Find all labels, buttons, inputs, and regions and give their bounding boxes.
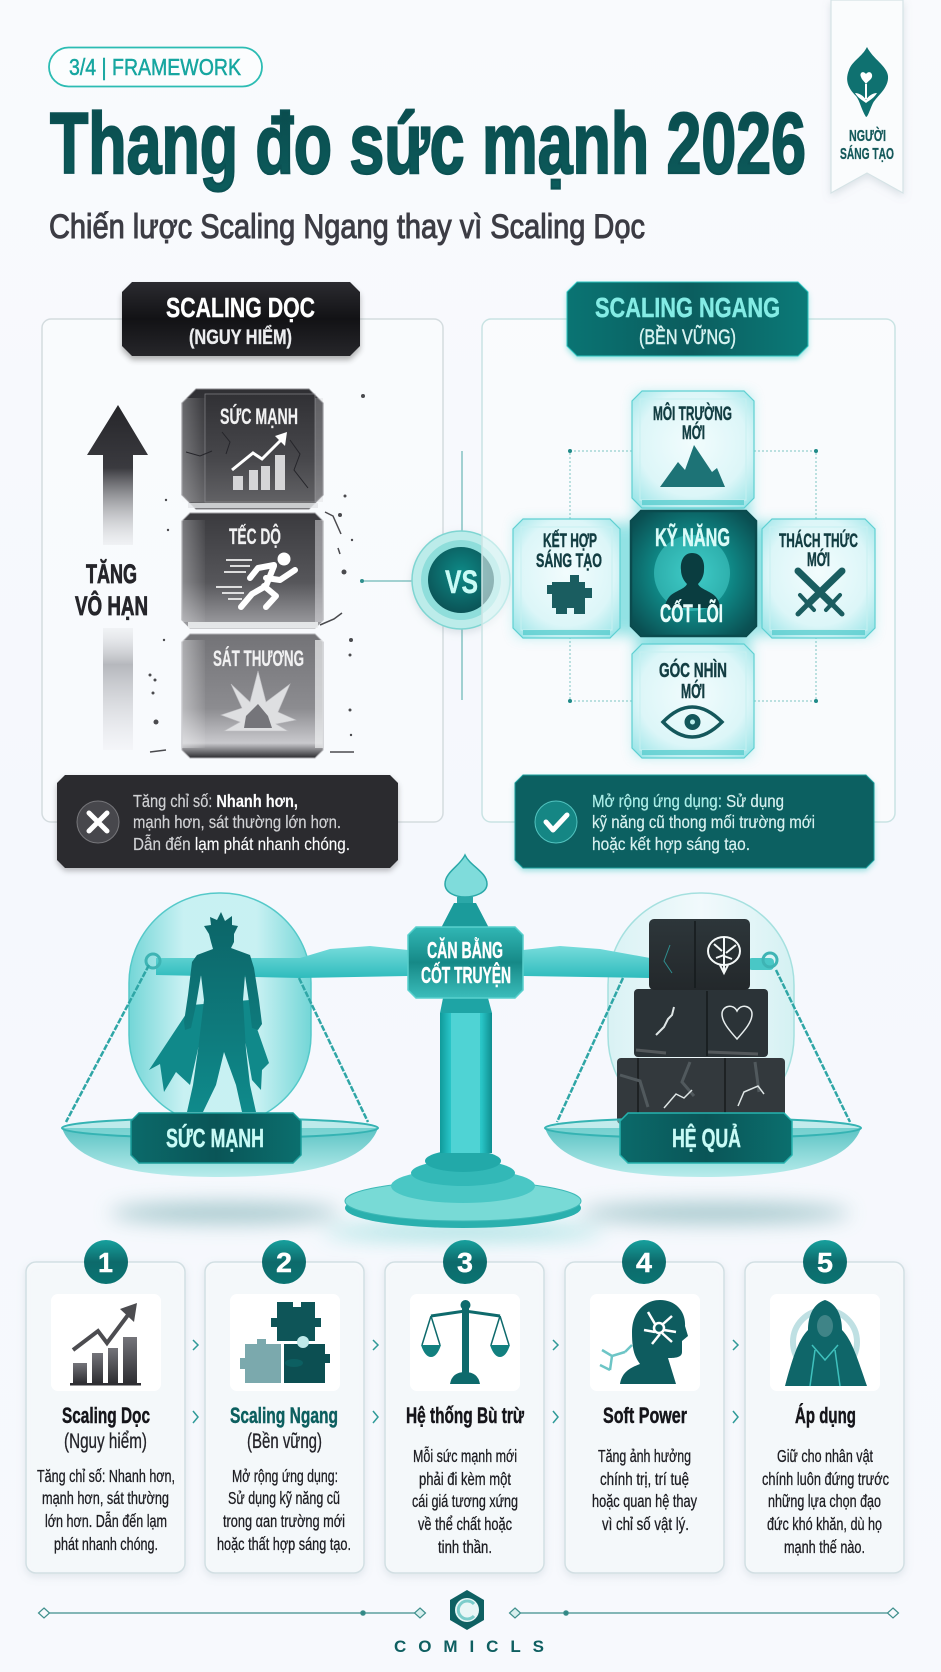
- icon: puzzle: [230, 1294, 340, 1391]
- step card 1: Tăng chỉ số: Nhanh hơn,: [37, 1466, 175, 1486]
- step card 4: chính trị, trí tuệ: [600, 1469, 689, 1489]
- badge 4: [622, 1240, 666, 1284]
- label: cân bằng cốt truyện: CỐT TRUYỆN: [421, 961, 511, 988]
- left dome: [129, 893, 311, 1125]
- right pan: [545, 1118, 861, 1177]
- block: sát thương: SÁT THƯƠNG: [213, 646, 304, 671]
- skill cross: [513, 391, 875, 758]
- icon: crossed swords: [798, 571, 842, 614]
- badge 3: [443, 1240, 487, 1284]
- heading banner: scaling dọc: SCALING DỌC: [166, 292, 315, 323]
- callout: tăng chỉ số: Dẫn đến lạm phát nhanh chóng.: [133, 833, 350, 854]
- callout: mở rộng ứng dụng: kỹ năng cũ thong mối trường mới: [592, 812, 815, 832]
- step card 4: Tăng ảnh hưởng: [598, 1446, 691, 1466]
- icon: balance: [410, 1294, 520, 1391]
- arrow: infinite growth: TĂNG: [86, 558, 137, 589]
- icon: growth chart: [232, 432, 287, 490]
- block: góc nhìn mới: MỚI: [681, 679, 705, 703]
- heading banner: scaling ngang: SCALING NGANG: [595, 292, 780, 323]
- step card 2: Mở rộng ứng dụng:: [232, 1466, 338, 1486]
- label: sức mạnh: [131, 1113, 301, 1163]
- footer rule left: [38, 1608, 426, 1618]
- icon: cross: [77, 801, 119, 843]
- step card 1: (Nguy hiểm): [64, 1430, 147, 1453]
- beam: [146, 946, 777, 978]
- icon: person silhouette: [665, 553, 720, 608]
- block: môi trường mới: MỚI: [682, 420, 705, 444]
- block: thách thức mới: MỚI: [807, 547, 830, 571]
- callout: mở rộng ứng dụng: Mở rộng ứng dụng: Sử dụng: [592, 791, 784, 811]
- step card 5: mạnh thế nào.: [784, 1537, 865, 1557]
- text: Hệ thống Bù trừ: [406, 1403, 524, 1428]
- header tag: 3/4 framework: 3/4 | FRAMEWORK: [69, 54, 242, 80]
- callout: tăng chỉ số: [57, 775, 398, 871]
- label: cân bằng cốt truyện: CĂN BẰNG: [427, 936, 503, 963]
- cube: middle: [634, 989, 768, 1057]
- subtitle: Chiến lược Scaling Ngang thay vì Scaling Dọc: [49, 208, 645, 246]
- left pan: [62, 1118, 378, 1177]
- debris shards: [148, 394, 365, 752]
- cube: top: [649, 919, 750, 990]
- step card 5: đức khó khăn, dù họ: [767, 1514, 882, 1534]
- connector lines: [568, 449, 818, 703]
- step card 4: [565, 1240, 724, 1573]
- chains: [66, 965, 850, 1122]
- step card 5: Giữ cho nhân vật: [777, 1446, 873, 1466]
- callout: mở rộng ứng dụng: hoặc kết hợp sáng tạo.: [592, 834, 750, 854]
- icon: heart: [722, 1006, 752, 1039]
- icon: eye: [663, 707, 722, 737]
- step card 1: lớn hơn. Dẫn đến lạm: [45, 1510, 167, 1531]
- icon: check: [535, 801, 577, 843]
- icon: explosion: [221, 671, 296, 731]
- vs medallion: VS: [445, 564, 478, 600]
- step card 1: mạnh hơn, sát thường: [42, 1488, 169, 1508]
- label: hệ quả: [620, 1113, 792, 1163]
- block: kết hợp sáng tạo: SÁNG TẠO: [536, 549, 602, 572]
- icon: head with network: [590, 1294, 700, 1391]
- arrow: infinite growth: [75, 405, 148, 750]
- step card 5: những lựa chọn đạo: [768, 1491, 881, 1511]
- badge 1: [84, 1240, 128, 1284]
- label: hệ quả: HỆ QUẢ: [672, 1123, 741, 1153]
- hero silhouette: [149, 912, 269, 1112]
- block: kỹ năng cốt lõi: KỸ NĂNG: [655, 522, 730, 552]
- panel frame: [482, 319, 895, 822]
- arrow: infinite growth: VÔ HẠN: [75, 590, 148, 621]
- step card 3: tinh thần.: [438, 1537, 492, 1557]
- bookmark ribbon: Người Sáng Tạo: SÁNG TẠO: [840, 144, 894, 163]
- icon: hooded figure: [770, 1294, 880, 1391]
- step card 1: phát nhanh chóng.: [54, 1534, 158, 1554]
- step chevrons: [193, 1340, 738, 1423]
- label: cân bằng cốt truyện: [408, 927, 523, 998]
- block: tốc độ: TẾC DỘ: [229, 524, 281, 549]
- panel: scaling ngang: [482, 282, 895, 871]
- heading banner: scaling ngang: [567, 282, 808, 359]
- block: thách thức mới: THÁCH THỨC: [779, 528, 858, 552]
- block stack: [148, 389, 365, 758]
- text: Scaling Dọc: [62, 1403, 150, 1428]
- icon: puzzle piece: [547, 575, 592, 614]
- cube: bottom: [617, 1058, 785, 1124]
- body: [184, 912, 262, 1112]
- step card 3: Mỗi sức mạnh mới: [413, 1445, 517, 1466]
- callout: mở rộng ứng dụng: [515, 775, 874, 871]
- block: sức mạnh: SỨC MẠNH: [220, 404, 298, 429]
- vs medallion: [360, 451, 510, 700]
- icon: runner: [216, 552, 295, 607]
- floor shadows: [110, 1203, 850, 1239]
- icon: brain: [708, 937, 740, 973]
- step card 2: hoặc thất hợp sáng tạo.: [217, 1534, 351, 1554]
- label: sức mạnh: SỨC MẠNH: [166, 1123, 264, 1153]
- step card 3: [385, 1240, 544, 1573]
- pole and base: [345, 998, 581, 1228]
- block: kết hợp sáng tạo: [513, 519, 620, 638]
- panel frame: [42, 319, 443, 822]
- block: môi trường mới: [632, 391, 754, 508]
- badge 2: [262, 1240, 306, 1284]
- block: sát thương: [182, 634, 323, 758]
- footer: [38, 1590, 898, 1656]
- consequence cubes: [617, 919, 785, 1124]
- step card 5: chính luôn đứng trước: [762, 1469, 889, 1489]
- block: kỹ năng cốt lõi: [631, 511, 756, 636]
- text: Áp dụng: [795, 1403, 856, 1428]
- bookmark ribbon: Người Sáng Tạo: NGƯỜI: [849, 126, 886, 145]
- text: Soft Power: [603, 1403, 687, 1428]
- block: tốc độ: [182, 513, 323, 628]
- step card 5: [745, 1240, 904, 1573]
- balance scale: [62, 855, 861, 1239]
- badge 3: 3: [457, 1247, 473, 1278]
- block: góc nhìn mới: [632, 644, 754, 758]
- right dome: [608, 893, 794, 1128]
- block glow: [517, 395, 871, 755]
- block: kỹ năng cốt lõi: CỐT LÕI: [660, 598, 723, 628]
- callout: tăng chỉ số: mạnh hơn, sát thường lớn hơn.: [133, 812, 341, 832]
- step card 3: phải đi kèm một: [419, 1469, 511, 1489]
- icon: growth chart: [51, 1294, 161, 1391]
- wordmark: COMICLS: [394, 1637, 544, 1656]
- panel: scaling dọc: [42, 282, 443, 871]
- block: kết hợp sáng tạo: KẾT HỢP: [543, 529, 597, 552]
- step card 3: về thể chất hoặc: [418, 1514, 512, 1534]
- text: Scaling Ngang: [230, 1403, 338, 1428]
- step card 2: [205, 1240, 364, 1573]
- heading banner: scaling dọc: [122, 282, 360, 360]
- block: sức mạnh: [182, 389, 323, 509]
- step card 2: trong αan trường mới: [223, 1511, 345, 1531]
- step card 1: [26, 1240, 185, 1573]
- step card 3: cái giá tương xứng: [412, 1491, 518, 1511]
- badge 5: 5: [817, 1247, 833, 1278]
- heading banner: scaling ngang: (BỀN VỮNG): [639, 325, 736, 349]
- step card 4: hoặc quan hệ thay: [592, 1491, 697, 1511]
- cape: [149, 1000, 269, 1092]
- step card 2: (Bền vững): [247, 1430, 322, 1453]
- step card 4: vì chỉ số vật lý.: [602, 1514, 689, 1534]
- block: góc nhìn mới: GÓC NHÌN: [659, 658, 727, 682]
- step card 2: Sử dụng kỹ năng cũ: [228, 1488, 340, 1508]
- logo: [450, 1590, 484, 1630]
- block: thách thức mới: [762, 519, 875, 638]
- badge 1: 1: [98, 1247, 113, 1278]
- block: môi trường mới: MÔI TRƯỜNG: [653, 401, 732, 425]
- callout: tăng chỉ số: Tăng chỉ số: Nhanh hơn,: [133, 791, 298, 811]
- badge 4: 4: [636, 1247, 652, 1278]
- footer rule right: [510, 1608, 898, 1618]
- heading banner: scaling dọc: (NGUY HIỂM): [189, 326, 292, 349]
- icon: mountain: [660, 445, 725, 487]
- header tag: 3/4 framework: [49, 48, 262, 86]
- icon: pen nib flame: [847, 47, 888, 117]
- bookmark ribbon: Người Sáng Tạo: [831, 0, 903, 193]
- badge 2: 2: [276, 1247, 292, 1278]
- badge 5: [803, 1240, 847, 1284]
- finial: [440, 855, 490, 930]
